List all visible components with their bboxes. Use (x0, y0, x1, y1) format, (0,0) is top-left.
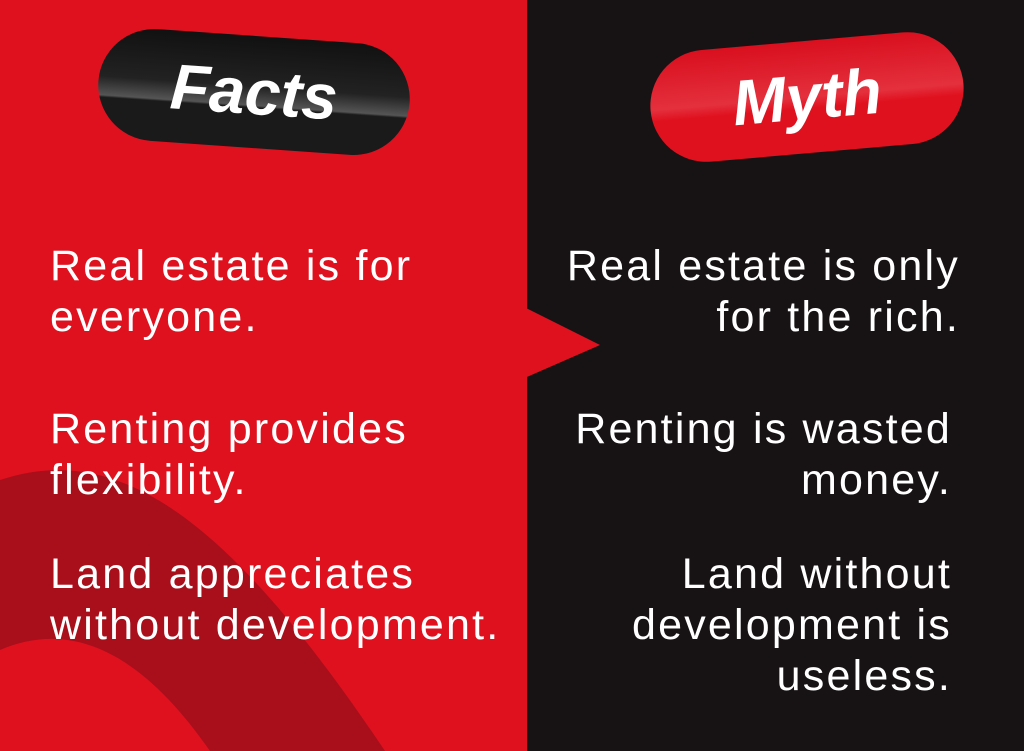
myth 2: money. (801, 456, 952, 504)
fact 3: without development. (50, 601, 500, 649)
arrow: pointer into myth side (527, 308, 600, 377)
myth pill (646, 28, 968, 166)
panel: facts background (0, 0, 527, 751)
facts pill: Facts (168, 50, 340, 134)
fact 2: Renting provides (50, 405, 408, 453)
fact 3: Land appreciates (50, 550, 415, 598)
facts pill (94, 25, 414, 159)
fact 2: flexibility. (50, 456, 248, 504)
fact 3 (50, 550, 500, 649)
myth 3: useless. (777, 652, 952, 700)
fact 1: Real estate is for (50, 242, 412, 290)
fact 1: everyone. (50, 293, 259, 341)
fact 1 (50, 242, 412, 341)
myth 3 (632, 550, 952, 700)
myth 3: Land without (682, 550, 952, 598)
myth 3: development is (632, 601, 952, 649)
myth 2: Renting is wasted (575, 405, 952, 453)
myth 1: Real estate is only (567, 242, 960, 290)
myth 1 (567, 242, 960, 341)
fact 2 (50, 405, 408, 504)
myth pill: Myth (729, 55, 885, 139)
myth 1: for the rich. (716, 293, 960, 341)
myth 2 (575, 405, 952, 504)
decorative arc band (0, 470, 385, 751)
